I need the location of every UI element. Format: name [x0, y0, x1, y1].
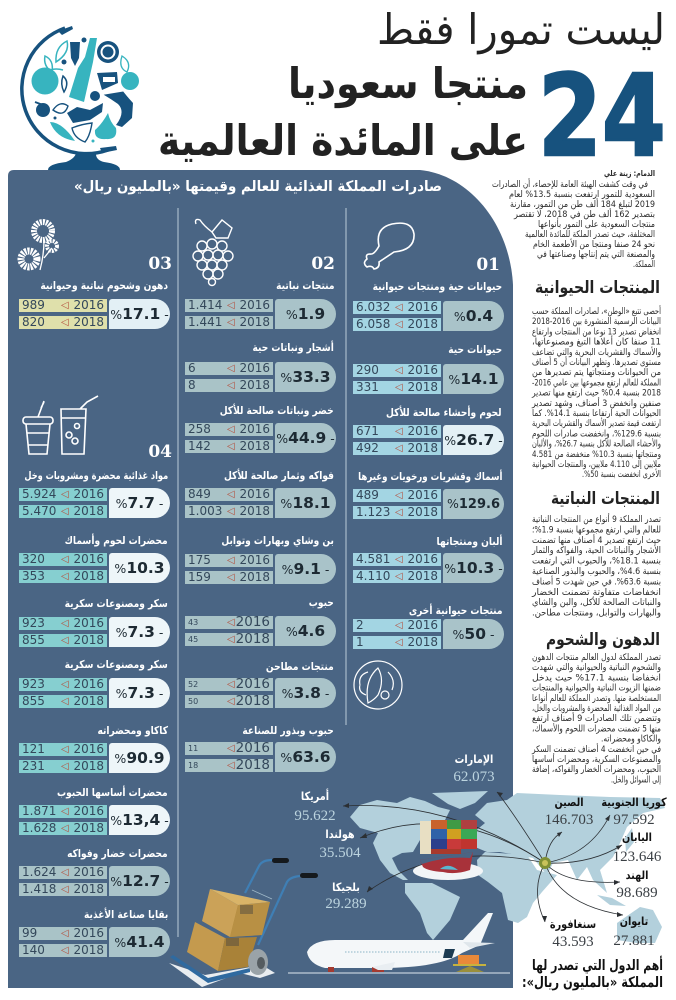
row: meat: 2016 — [407, 424, 438, 438]
row: cereal preparations — [19, 786, 170, 835]
row: plant products: 1.414 — [188, 298, 222, 312]
row: trees — [185, 340, 336, 392]
row: prepared foods: ◁ — [61, 489, 69, 500]
panel heading: صادرات المملكة الغذائية للعالم وقيمتها «بالمليون ريال» — [74, 179, 442, 195]
icon: grapes — [193, 220, 233, 286]
row: live animals and products: %0.4 — [454, 307, 493, 325]
icon: container ship — [413, 820, 483, 880]
map label: UAE: الإمارات — [455, 752, 493, 766]
row: sugar repeat: ◁ — [61, 679, 69, 690]
row: dairy: 2018 — [407, 569, 438, 583]
row: food industry residues: 99 — [22, 926, 37, 940]
row: live animals: 2016 — [407, 363, 438, 377]
row: plant products: ◁ — [227, 300, 235, 311]
paragraph: animal products: من الحيوانات ومنتجاتها يتم تصديرها من — [532, 368, 661, 378]
map label: UAE — [453, 752, 495, 785]
row: sugar repeat: ◁ — [61, 696, 69, 707]
row: industrial seeds: %63.6 — [280, 748, 331, 766]
icon: chicken leg — [364, 223, 414, 269]
row: industrial seeds: 2016 — [236, 740, 270, 756]
row: milling products: 2016 — [236, 676, 270, 692]
row: cocoa: ◁ — [61, 761, 69, 772]
row: vegetables — [185, 404, 336, 453]
row: sugar repeat: 855 — [22, 694, 45, 708]
row: vegetables: %44.9 - — [276, 429, 335, 447]
map label: Japan — [613, 830, 661, 865]
row: trees: أشجار ونباتات حية — [253, 341, 334, 354]
paragraph: plant products: بنسبة 63.6%. في حين شهدت 5 أصناف — [532, 575, 661, 587]
arrowheads — [343, 792, 623, 922]
row: fish: 1.123 — [356, 505, 390, 519]
row: industrial seeds: 18 — [188, 761, 198, 770]
row: food industry residues — [19, 908, 170, 957]
row: trees: ◁ — [227, 363, 235, 374]
row: meat: لحوم وأحشاء صالحة للأكل — [386, 406, 502, 419]
row: milling products: ◁ — [227, 679, 235, 690]
row: milling products: 50 — [188, 697, 198, 706]
row: vegetable and fruit preparations — [19, 847, 170, 896]
row: meat: ◁ — [395, 443, 403, 454]
row: fish: 489 — [356, 488, 379, 502]
row: meat: 492 — [356, 441, 379, 455]
row: food industry residues: ◁ — [61, 928, 69, 939]
arrows: export routes — [343, 792, 623, 922]
row: fats and oils: 2016 — [73, 298, 104, 312]
row: milling products: 52 — [188, 680, 198, 689]
row: meat and fish preparations — [19, 534, 170, 583]
row: meat and fish preparations: محضرات لحوم وأسماك — [65, 534, 168, 547]
row: fats and oils: ◁ — [61, 317, 69, 328]
paragraph: animal products: بنسبة 129.6%، وانخفضت صادرات اللحوم — [532, 429, 661, 439]
icon: origin Saudi Arabia globe — [539, 857, 551, 869]
paragraph: animal products: ومنتجاتها بنسبة 10.3% منخفضة من 4.581 — [532, 450, 661, 460]
row: grains: 2018 — [236, 631, 270, 647]
row: milling products — [185, 660, 336, 709]
paragraph: plant products: الأشجار والنباتات الحية، والفواكه والثمار — [531, 544, 661, 556]
row: sugar: 2016 — [73, 616, 104, 630]
map label: Singapore: سنغافورة — [550, 917, 596, 931]
paragraph: fats and oils: انخفاضا بنسبة 17.1% حيث يدخل — [532, 673, 661, 683]
row: other animal products: 2016 — [407, 618, 438, 632]
row: trees: 2016 — [239, 361, 270, 375]
row: vegetables: خضر ونباتات صالحة للأكل — [220, 404, 334, 417]
heading: top destination countries — [522, 956, 663, 991]
map label: Netherlands — [319, 827, 361, 861]
row: fats and oils: %17.1 - — [110, 305, 169, 323]
paragraph: fats and oils: وتتضمن تلك الصادرات 9 أصناف ارتفع — [532, 712, 661, 724]
row: cocoa — [19, 724, 170, 773]
row: cocoa: ◁ — [61, 744, 69, 755]
row: live animals: 290 — [356, 363, 379, 377]
row: milling products: منتجات مطاحن — [266, 660, 334, 673]
icon: airplane — [288, 913, 510, 973]
row: vegetables: 142 — [188, 439, 211, 453]
row: vegetables: 2016 — [239, 422, 270, 436]
row: fats and oils: ◁ — [61, 300, 69, 311]
row: fruit: 2016 — [239, 487, 270, 501]
row: industrial seeds: 11 — [188, 744, 198, 753]
row: trees: %33.3 — [280, 368, 331, 386]
row: plant products: 1.441 — [188, 315, 222, 329]
map label: India — [616, 868, 658, 901]
paragraph: plant products: بنسبة 18.1%، والحبوب التي ارتفعت — [532, 557, 661, 567]
row: vegetables: ◁ — [227, 441, 235, 452]
map label: Belgium — [325, 880, 367, 912]
row: fruit: فواكه وثمار صالحة للأكل — [224, 469, 334, 482]
map label: UAE: 62.073 — [453, 769, 495, 785]
row: grains: 2016 — [236, 614, 270, 630]
row: fruit — [185, 468, 336, 518]
row: sugar repeat: %7.3 - — [116, 684, 163, 702]
row: meat and fish preparations: 353 — [22, 569, 45, 583]
row: vegetables: 258 — [188, 422, 211, 436]
icon: fish in circle — [354, 661, 402, 709]
map label: Taiwan: تايوان — [620, 914, 648, 928]
row: trees: 6 — [188, 361, 196, 375]
row: plant products: 2016 — [239, 298, 270, 312]
row: prepared foods: 5.470 — [22, 504, 56, 518]
paragraph: plant products: حيث ارتفع تصدير 4 أصناف منها تضمنت — [532, 534, 661, 546]
row: fish: 2016 — [407, 488, 438, 502]
map label: USA: أمريكا — [301, 789, 329, 803]
row: cereal preparations: ◁ — [61, 806, 69, 817]
row: sugar repeat — [19, 658, 170, 708]
paragraph: animal products: ملايين إلى 4.110 ملايين، والمنتجات الحيوانية — [532, 460, 661, 470]
intro paragraph: 2019 لتبلغ 184 ألف طن من التمور، مقارنة — [510, 198, 655, 210]
row: dairy: %10.3 - — [444, 559, 503, 577]
row: live animals and products: ◁ — [395, 302, 403, 313]
paragraph: animal products: 2018 بنسبة 0.4% حيث ارتفع منها تصدير — [531, 389, 661, 399]
paragraph: plant products: بنسبة 4.6%، والحبوب والبذور الصناعية — [532, 567, 661, 577]
row: other animal products: 2 — [356, 618, 364, 632]
row: industrial seeds: ◁ — [227, 743, 235, 754]
row: plant products: %1.9 — [286, 305, 325, 323]
row: grains: ◁ — [227, 634, 235, 645]
chart: world map — [350, 791, 665, 943]
intro paragraph: السعودية للتمور ارتفعت بنسبة 13.5% لعام — [509, 190, 655, 200]
row: milling products: %3.8 - — [282, 684, 329, 702]
row: coffee tea spices: ◁ — [227, 555, 235, 566]
row: sugar repeat: 2016 — [73, 677, 104, 691]
row: meat and fish preparations: 2018 — [73, 569, 104, 583]
icon: cups — [23, 396, 98, 454]
row: fruit: 1.003 — [188, 504, 222, 518]
row: meat: %26.7 - — [444, 431, 503, 449]
row: cocoa: 2016 — [73, 742, 104, 756]
row: meat and fish preparations: 320 — [22, 552, 45, 566]
row: cereal preparations: %13,4 - — [110, 811, 169, 829]
map label: China: الصين — [554, 795, 584, 809]
row: dairy: ◁ — [395, 571, 403, 582]
map label: China: 146.703 — [545, 812, 593, 828]
row: vegetable and fruit preparations: 2018 — [73, 882, 104, 896]
map label: Taiwan — [613, 914, 655, 949]
section number 03: 03 — [148, 254, 172, 274]
row: fish: أسماك وقشريات ورخويات وغيرها — [358, 470, 502, 483]
row: sugar: ◁ — [61, 618, 69, 629]
map label: Belgium: بلجيكا — [332, 880, 360, 894]
row: meat — [353, 406, 504, 455]
row: sugar: 2018 — [73, 633, 104, 647]
row: fats and oils: 2018 — [73, 315, 104, 329]
row: other animal products: منتجات حيوانية أخرى — [408, 604, 502, 617]
section number 01: 01 — [476, 255, 500, 275]
row: grains: حبوب — [309, 596, 334, 609]
map label: Singapore — [550, 917, 596, 950]
row: live animals and products — [353, 280, 504, 331]
paragraph: plant products — [531, 513, 661, 619]
icon: hand truck with boxes — [169, 858, 318, 987]
row: fish: %129.6 — [447, 496, 500, 512]
row: live animals: %14.1 — [448, 370, 499, 388]
row: cocoa: كاكاو ومحضراته — [97, 724, 168, 737]
row: other animal products: ◁ — [395, 620, 403, 631]
map label: South Korea: 97.592 — [613, 812, 655, 828]
row: vegetable and fruit preparations: ◁ — [61, 867, 69, 878]
row: cocoa: %90.9 — [114, 749, 165, 767]
paragraph: animal products: صنفين وانخفض 3 أصناف، وشهد تصدير — [531, 397, 661, 409]
icon: dill plant — [21, 222, 57, 270]
row: cocoa: 121 — [22, 742, 45, 756]
row: food industry residues: 2016 — [73, 926, 104, 940]
row: dairy: ◁ — [395, 554, 403, 565]
row: prepared foods: ◁ — [61, 506, 69, 517]
map label: South Korea — [601, 795, 667, 828]
row: plant products: ◁ — [227, 317, 235, 328]
row: sugar repeat: 2018 — [73, 694, 104, 708]
section number 04: 04 — [148, 442, 172, 462]
row: cereal preparations: 1.871 — [22, 804, 56, 818]
row: other animal products: 1 — [356, 635, 364, 649]
row: fish: ◁ — [395, 507, 403, 518]
row: dairy: ألبان ومنتجاتها — [436, 535, 502, 548]
row: vegetable and fruit preparations: 2016 — [73, 865, 104, 879]
title block with globe — [20, 5, 666, 170]
row: food industry residues: بقايا صناعة الأغذية — [84, 908, 168, 921]
row: food industry residues: ◁ — [61, 945, 69, 956]
map label: Taiwan: 27.881 — [613, 933, 655, 949]
row: fats and oils — [19, 279, 170, 329]
row: meat: ◁ — [395, 426, 403, 437]
title line 2: منتجا سعوديا — [288, 59, 528, 109]
row: cereal preparations: 2018 — [73, 821, 104, 835]
row: fish: 2018 — [407, 505, 438, 519]
map label: Japan: 123.646 — [613, 849, 661, 865]
intro paragraph: بتصدير 162 ألف طن في 2018، لا تقتصر — [513, 208, 655, 220]
row: industrial seeds: 2018 — [236, 757, 270, 773]
row: fats and oils: 989 — [22, 298, 45, 312]
row: other animal products: %50 - — [453, 625, 494, 643]
map label: India: الهند — [626, 868, 648, 882]
row: sugar: سكر ومصنوعات سكرية — [65, 597, 168, 610]
intro paragraph: والمصنعة التي يتم إنتاجها وصناعتها في — [537, 250, 655, 260]
map label: USA: 95.622 — [294, 808, 336, 824]
row: food industry residues: %41.4 — [114, 933, 165, 951]
map label: Japan: اليابان — [622, 830, 652, 844]
paragraph: animal products: 11 صنفا كان أعلاها التبغ ومصنوعاتها، — [532, 336, 661, 348]
row: live animals: 2018 — [407, 380, 438, 394]
map label: Belgium: 29.289 — [325, 896, 367, 912]
map label: India: 98.689 — [616, 885, 658, 901]
row: plant products: منتجات نباتية — [276, 279, 334, 292]
row: prepared foods: 2018 — [73, 504, 104, 518]
row: vegetable and fruit preparations: 1.418 — [22, 882, 56, 896]
row: grains: ◁ — [227, 617, 235, 628]
row: plant products — [185, 279, 336, 329]
row: cocoa: 2018 — [73, 759, 104, 773]
row: coffee tea spices: ◁ — [227, 572, 235, 583]
section number 02: 02 — [311, 254, 335, 274]
row: grains: 45 — [188, 635, 198, 644]
paragraph: fats and oils — [531, 653, 661, 785]
paragraph: animal products: انخفاض تصدير 13 نوعا من المنتجات وارتفاع — [532, 327, 661, 337]
row: live animals: حيوانات حية — [448, 343, 502, 356]
map label: China — [545, 795, 593, 828]
row: meat and fish preparations: %10.3 — [114, 559, 165, 577]
row: sugar: 923 — [22, 616, 45, 630]
row: meat and fish preparations: ◁ — [61, 554, 69, 565]
paragraph: plant products: والنباتات الصالحة للأكل، والبن والشاي — [532, 596, 661, 608]
row: fats and oils: 820 — [22, 315, 45, 329]
row: dairy: 2016 — [407, 552, 438, 566]
row: plant products: 2018 — [239, 315, 270, 329]
row: grains: %4.6 — [286, 622, 325, 640]
row: fruit: 849 — [188, 487, 211, 501]
title line 1: ليست تمورا فقط — [377, 5, 665, 54]
row: live animals: ◁ — [395, 382, 403, 393]
row: vegetable and fruit preparations: محضرات خضار وفواكه — [67, 847, 168, 860]
row: coffee tea spices: 159 — [188, 570, 211, 584]
row: coffee tea spices: 2018 — [239, 570, 270, 584]
paragraph: fats and oils: منها 5 تضمنت محضرات اللحوم والأسماك، — [532, 722, 661, 734]
row: sugar — [19, 597, 170, 647]
row: fish — [353, 470, 504, 519]
intro paragraph — [492, 178, 655, 270]
panel: exports — [8, 170, 513, 988]
row: vegetable and fruit preparations: ◁ — [61, 884, 69, 895]
intro paragraph: منتجات السعودية على التمور بأنواعها — [538, 217, 655, 230]
row: fruit: %18.1 — [280, 494, 331, 512]
row: trees: ◁ — [227, 380, 235, 391]
row: dairy — [353, 534, 504, 583]
byline: الدمام: زينة علي — [604, 169, 655, 178]
row: other animal products: ◁ — [395, 637, 403, 648]
paragraph: plant products: انخفاضات متفاوتة تضمنت الخضار — [531, 588, 661, 598]
row: sugar: 855 — [22, 633, 45, 647]
icon: cargo on lift — [453, 955, 486, 972]
row: coffee tea spices: بن وشاي وبهارات وتوابل — [221, 534, 334, 547]
row: live animals and products: 2016 — [407, 300, 438, 314]
intro paragraph: نحو 24 صنفا ومنتجا من الأطعمة الخام — [533, 238, 655, 250]
row: cocoa: 231 — [22, 759, 45, 773]
row: milling products: 2018 — [236, 693, 270, 709]
row: cereal preparations: 1.628 — [22, 821, 56, 835]
row: prepared foods: مواد غذائية محضرة ومشروبات وخل — [24, 469, 168, 482]
row: dairy: 4.110 — [356, 569, 390, 583]
row: industrial seeds — [185, 724, 336, 773]
row: vegetables: 2018 — [239, 439, 270, 453]
row: trees: 2018 — [239, 378, 270, 392]
row: fruit: ◁ — [227, 489, 235, 500]
row: grains: 43 — [188, 618, 198, 627]
row: fats and oils: دهون وشحوم نباتية وحيوانية — [40, 279, 168, 292]
row: meat: 671 — [356, 424, 379, 438]
row: live animals and products: 6.032 — [356, 300, 390, 314]
paragraph: plant products: تصدر المملكة 9 أنواع من المنتجات النباتية — [532, 513, 661, 525]
row: live animals and products: ◁ — [395, 319, 403, 330]
row: coffee tea spices: %9.1 - — [282, 560, 329, 578]
map label: Netherlands: 35.504 — [319, 845, 361, 861]
row: food industry residues: 140 — [22, 943, 45, 957]
icon: food globe — [22, 26, 139, 170]
map label: South Korea: كوريا الجنوبية — [601, 795, 667, 809]
map label: USA — [294, 788, 336, 824]
row: coffee tea spices: 175 — [188, 553, 211, 567]
row: prepared foods — [19, 469, 170, 518]
title line 3: على المائدة العالمية — [158, 116, 528, 165]
paragraph: plant products: والبهارات والتوابل، ومنتجات مطاحن. — [532, 609, 661, 619]
paragraph: animal products — [531, 305, 661, 480]
row: dairy: 4.581 — [356, 552, 390, 566]
row: coffee tea spices — [185, 534, 336, 584]
row: live animals — [353, 343, 504, 394]
row: trees: 8 — [188, 378, 196, 392]
row: meat and fish preparations: 2016 — [73, 552, 104, 566]
row: vegetables: ◁ — [227, 424, 235, 435]
row: live animals and products: 6.058 — [356, 317, 390, 331]
row: sugar: %7.3 - — [116, 623, 163, 641]
paragraph: fats and oils: والكاكاو ومحضراته. — [601, 735, 661, 745]
row: food industry residues: 2018 — [73, 943, 104, 957]
row: vegetable and fruit preparations: %12.7 - — [110, 872, 169, 890]
row: milling products: ◁ — [227, 696, 235, 707]
paragraph: fats and oils: في حين انخفضت 4 أصناف تضمنت السكر — [531, 743, 661, 755]
row: sugar repeat: سكر ومصنوعات سكرية — [65, 658, 168, 671]
row: cereal preparations: 2016 — [73, 804, 104, 818]
row: live animals: 331 — [356, 380, 379, 394]
row: live animals: ◁ — [395, 365, 403, 376]
row: meat: 2018 — [407, 441, 438, 455]
row: other animal products — [353, 604, 504, 649]
row: industrial seeds: حبوب وبذور للصناعة — [243, 724, 334, 737]
intro paragraph: المملكة. — [633, 260, 655, 270]
row: sugar: ◁ — [61, 635, 69, 646]
row: industrial seeds: ◁ — [227, 760, 235, 771]
row: fruit: 2018 — [239, 504, 270, 518]
row: live animals and products: حيوانات حية ومنتجات حيوانية — [372, 280, 502, 293]
row: cereal preparations: ◁ — [61, 823, 69, 834]
map label: Netherlands: هولندا — [325, 827, 355, 841]
map label: Singapore: 43.593 — [552, 934, 594, 950]
row: fruit: ◁ — [227, 506, 235, 517]
row: prepared foods: %7.7 - — [116, 494, 163, 512]
row: prepared foods: 5.924 — [22, 487, 56, 501]
row: fish: ◁ — [395, 490, 403, 501]
row: coffee tea spices: 2016 — [239, 553, 270, 567]
row: live animals and products: 2018 — [407, 317, 438, 331]
row: cereal preparations: محضرات أساسها الحبوب — [57, 786, 168, 799]
row: prepared foods: 2016 — [73, 487, 104, 501]
row: vegetable and fruit preparations: 1.624 — [22, 865, 56, 879]
row: grains — [185, 596, 336, 647]
row: meat and fish preparations: ◁ — [61, 571, 69, 582]
row: other animal products: 2018 — [407, 635, 438, 649]
row: sugar repeat: 923 — [22, 677, 45, 691]
